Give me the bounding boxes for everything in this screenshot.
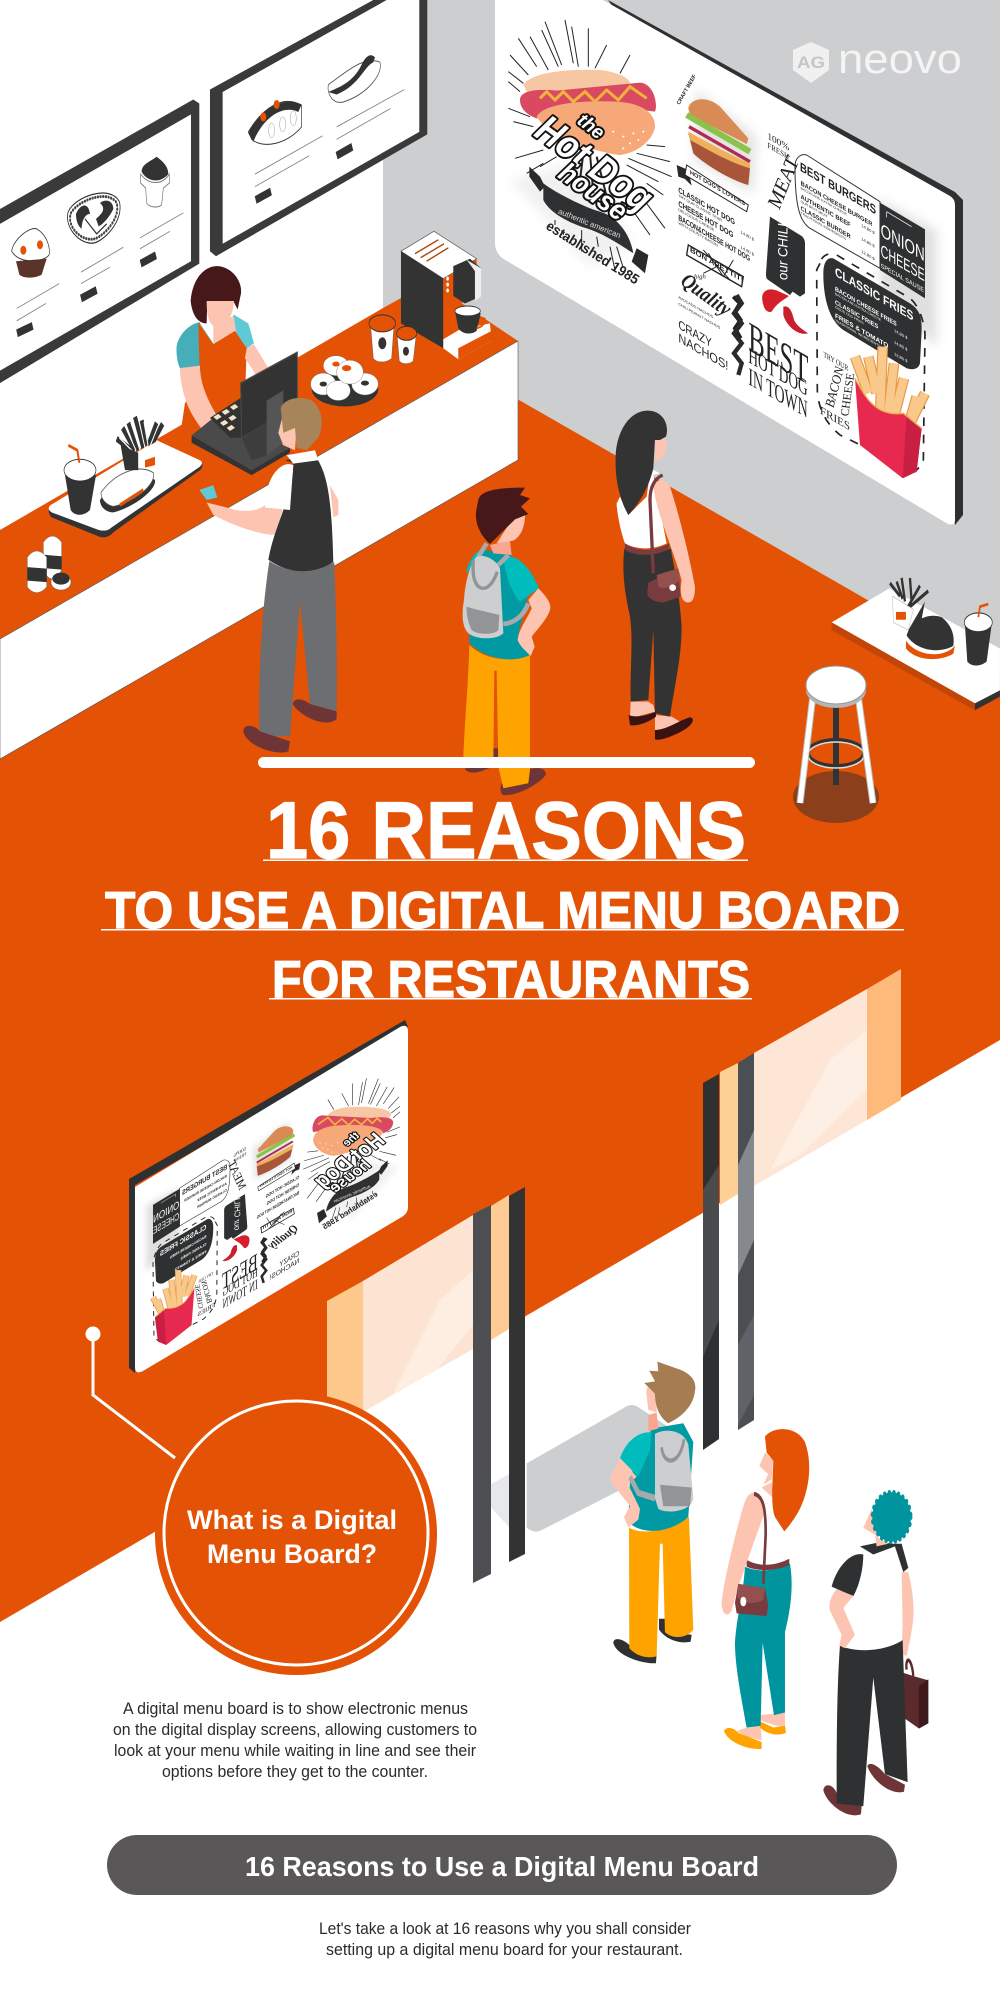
small board artwork: CLASSIC HOT DOG xyxy=(266,1175,299,1200)
board art right: CLASSIC BURGER xyxy=(801,205,851,241)
board art right: CLASSIC FRIES xyxy=(835,265,913,324)
board art left: TRY OUR CLASSIC STAR xyxy=(678,193,722,223)
board art right: 14.80 $ xyxy=(861,223,875,236)
board art right: our CHILI xyxy=(774,223,790,280)
cash register xyxy=(192,352,297,475)
small board artwork: FRIES xyxy=(197,1301,215,1319)
board art left xyxy=(508,20,757,373)
board art right: AUTHENTIC BEEF xyxy=(801,194,851,229)
script logo: Hot Dog xyxy=(527,107,661,221)
board art right: MEAT xyxy=(763,153,805,213)
brand logo: AG neovo: AG xyxy=(797,53,825,72)
title: TO USE A DIGITAL MENU BOARD xyxy=(105,882,900,940)
menu screen left xyxy=(0,100,199,383)
board art left: NACHOS! xyxy=(678,331,728,373)
board art right: ONION xyxy=(881,220,925,266)
callout circle: Menu Board? xyxy=(207,1539,377,1569)
small board artwork: CHEESE HOT DOG xyxy=(267,1182,299,1207)
board art right: TRADITIONAL INGREDIENTS xyxy=(801,211,847,242)
section heading pill xyxy=(107,1835,897,1895)
small board artwork: BEST xyxy=(222,1247,258,1295)
board art right: OUR BEST MEAT xyxy=(801,200,828,219)
board art right: 12.80 $ xyxy=(894,351,908,364)
icon: hot dog xyxy=(328,55,380,102)
board art right: BEST xyxy=(748,312,808,394)
board art right: IN TOWN xyxy=(748,362,808,424)
board art right: CHEESE xyxy=(837,372,857,417)
board art left: WITH CRUSTY BACON xyxy=(678,220,718,248)
board art left: CHILI PEANUT NACHOS xyxy=(678,301,720,330)
callout circle xyxy=(155,1393,437,1675)
board art left: DELICIOUS CHEESE xyxy=(678,207,714,232)
board art right: 12.80 $ xyxy=(861,249,875,262)
script logo: house xyxy=(553,156,633,227)
script logo: the xyxy=(573,110,608,144)
board art right: HOT DOG xyxy=(748,343,808,402)
small board artwork: BON APETTIT! xyxy=(260,1208,292,1232)
board art right xyxy=(734,131,937,478)
left window and door xyxy=(327,1187,525,1583)
small board artwork: established 1985 xyxy=(320,1190,379,1231)
small board artwork: BEST BURGERS xyxy=(182,1163,227,1197)
definition paragraph: look at your menu while waiting in line and see their xyxy=(114,1741,476,1760)
closing intro text xyxy=(319,1919,691,1959)
small board artwork: HOT DOG xyxy=(223,1265,258,1300)
tray with food xyxy=(49,417,202,537)
donut plate xyxy=(311,356,378,406)
board art right: TRADITIONAL INGREDIENTS xyxy=(835,319,881,349)
board art right: 14.80 $ xyxy=(894,340,908,352)
small board artwork: MEAT xyxy=(224,1157,250,1193)
sauce bottles xyxy=(27,528,71,593)
board art right: 14.80 $ xyxy=(861,236,875,249)
small board artwork: Quality xyxy=(264,1221,300,1252)
small board artwork: TRY OUR xyxy=(198,1272,213,1285)
closing intro text: setting up a digital menu board for your restaurant. xyxy=(326,1940,683,1959)
small board artwork: BACON CHEESE FRIES xyxy=(169,1234,206,1260)
small board artwork: the xyxy=(341,1130,362,1149)
stool xyxy=(793,666,879,823)
board art left: CRAFT BEEF xyxy=(676,73,698,106)
small board artwork xyxy=(146,1077,400,1346)
board art left: authentic american xyxy=(557,207,622,240)
small board artwork: CLASSIC FRIES xyxy=(180,1241,206,1261)
definition paragraph: on the digital display screens, allowing customers to xyxy=(113,1720,477,1739)
board art left: HOT DOG'S LOVERS xyxy=(690,169,746,208)
orange floor and lower wall xyxy=(0,400,1000,1622)
small board artwork: house xyxy=(326,1156,374,1197)
icon: ice cream xyxy=(141,157,169,207)
definition paragraph: options before they get to the counter. xyxy=(162,1762,428,1781)
icon: cupcake xyxy=(12,229,49,278)
closing intro text: Let's take a look at 16 reasons why you shall consider xyxy=(319,1919,691,1938)
red-haired woman xyxy=(722,1429,809,1749)
board art right: CHEESE xyxy=(881,240,925,285)
menu screen right xyxy=(210,0,427,256)
right window and door xyxy=(703,969,901,1450)
board art right: BACON xyxy=(822,364,847,409)
board art left: AVOCADO NACHOS xyxy=(678,295,713,319)
title: 16 REASONS xyxy=(266,786,746,876)
board art left: CLASSIC HOT DOG xyxy=(678,185,735,227)
small board artwork: CHEESE xyxy=(193,1284,205,1309)
small board artwork: 100% xyxy=(233,1146,246,1159)
board art right: BACON AND EXTRA CHEESE xyxy=(835,292,882,322)
board art left: BACON&CHEESE HOT DOG xyxy=(678,213,750,263)
brand logo: AG neovo xyxy=(793,35,962,83)
board art right: TRY OUR xyxy=(823,349,848,373)
board art left: high xyxy=(694,273,706,280)
board art right: GOOD OLD FRIES xyxy=(835,305,864,326)
customer paying xyxy=(199,398,338,753)
woman with shoulder bag xyxy=(616,411,695,740)
white left wall xyxy=(0,0,427,560)
title rule xyxy=(258,757,755,768)
small board artwork: HOT DOG'S LOVERS xyxy=(259,1165,292,1189)
board art left: BON APETTIT! xyxy=(690,245,743,284)
small board artwork: CLASSIC FRIES xyxy=(160,1223,206,1258)
definition paragraph: A digital menu board is to show electronic menus xyxy=(123,1699,468,1718)
board art right: FRIES xyxy=(820,403,850,433)
small board artwork: ONION xyxy=(153,1199,179,1226)
board art right: BACON AND EXTRA CHEESE xyxy=(801,186,847,217)
board art right: SPECIAL SAUSE xyxy=(881,263,924,294)
small board artwork: CRAZY xyxy=(279,1249,299,1269)
board art left: CRAZY xyxy=(678,317,712,350)
small board artwork: Hot Dog xyxy=(309,1126,389,1193)
callout circle: What is a Digital xyxy=(187,1505,397,1535)
section heading pill: 16 Reasons to Use a Digital Menu Board xyxy=(245,1851,759,1882)
small board artwork: IN TOWN xyxy=(223,1276,258,1312)
side table with food xyxy=(832,578,1000,710)
mirrored small menu board xyxy=(129,1020,408,1373)
grey back wall xyxy=(383,0,1000,720)
board art right: BEST BURGERS xyxy=(800,160,876,217)
board art right: CLASSIC FRIES xyxy=(835,299,879,331)
boy with backpack lower xyxy=(609,1362,695,1663)
fries box xyxy=(117,417,163,470)
board art right: 14.80 $ xyxy=(894,328,908,341)
boy with backpack xyxy=(463,488,550,795)
callout connector xyxy=(87,1328,175,1458)
board art right: BACON CHEESE FRIES xyxy=(835,286,897,328)
title: FOR RESTAURANTS xyxy=(272,951,750,1009)
small board artwork: BACON CHEESE BURGER xyxy=(184,1173,227,1203)
icon: taco xyxy=(248,100,302,144)
small board artwork: FRESH xyxy=(233,1152,246,1164)
title xyxy=(101,786,904,1009)
board art right: BACON CHEESE BURGER xyxy=(801,180,872,228)
small board artwork: AUTHENTIC BEEF xyxy=(197,1181,227,1203)
board art right: FRIES & TOMATO xyxy=(835,313,889,350)
man with briefcase xyxy=(823,1492,928,1815)
coffee machine xyxy=(401,231,492,359)
small board artwork: BACON&CHEESE HOT DOG xyxy=(257,1190,299,1221)
board art left: CHEESE HOT DOG xyxy=(678,199,734,240)
board art left: established 1985 xyxy=(543,217,643,287)
board art right: FRESH xyxy=(767,140,789,162)
brand logo: AG neovo: neovo xyxy=(838,35,962,82)
counter xyxy=(0,282,518,759)
small board artwork: NACHOS! xyxy=(270,1256,299,1282)
big digital menu board xyxy=(495,0,963,525)
small board artwork: FRIES & TOMATO xyxy=(175,1249,206,1272)
takeaway cups xyxy=(369,315,417,364)
floor shadow through door xyxy=(490,1405,667,1532)
board art right: 100% xyxy=(767,131,790,154)
small board artwork: authentic american xyxy=(332,1184,371,1204)
small board artwork: CLASSIC BURGER xyxy=(197,1187,227,1209)
board art right: 14.80 $ xyxy=(741,245,755,257)
drink cup xyxy=(64,445,96,515)
board art left: Quality xyxy=(676,270,736,321)
icon: pretzel xyxy=(67,193,120,243)
small board artwork: our CHILI xyxy=(233,1197,242,1230)
sandwich xyxy=(100,469,155,512)
definition paragraph xyxy=(113,1699,477,1781)
small board artwork: BACON xyxy=(199,1279,214,1304)
items on counter xyxy=(27,231,492,593)
board art right: 14.80 $ xyxy=(741,230,755,242)
cashier xyxy=(176,266,268,450)
small board artwork: CHEESE xyxy=(153,1211,179,1237)
